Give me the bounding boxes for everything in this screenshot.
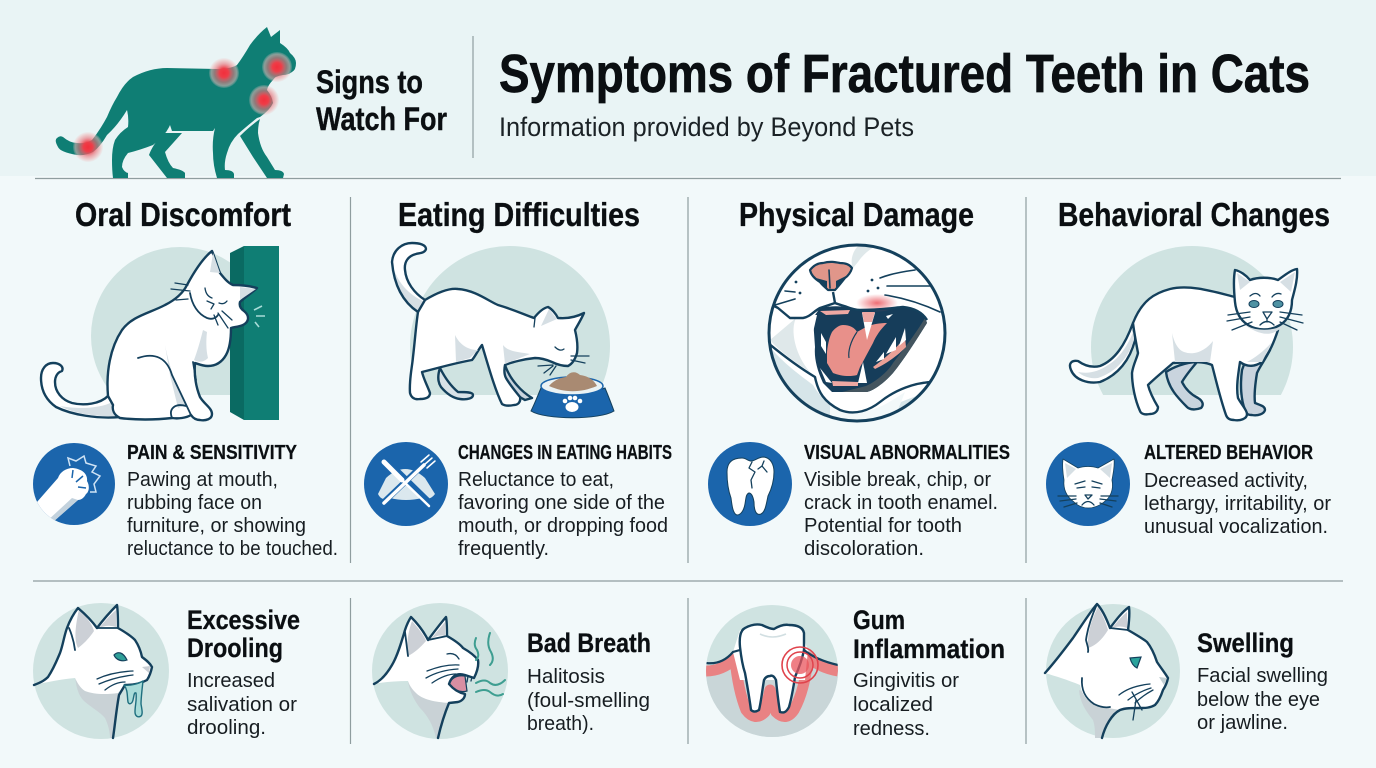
illustration: open mouth with broken tooth — [768, 245, 950, 430]
text: pain and sensitivity: furniture, or showing — [127, 514, 306, 537]
text: gum inflammation — [853, 605, 1005, 740]
text: swelling: or jawline. — [1197, 711, 1288, 734]
text: swelling: Facial swelling — [1197, 664, 1328, 687]
text: visual abnormalities: crack in tooth enamel. — [804, 491, 998, 514]
text: altered behavior: lethargy, irritability, or — [1144, 492, 1331, 515]
heading: Oral Discomfort — [75, 196, 291, 233]
panel: behavioral changes — [1046, 196, 1331, 538]
text: changes in eating habits: mouth, or dropping food — [458, 514, 668, 537]
text: pain and sensitivity: reluctance to be touched. — [127, 537, 338, 560]
text: changes in eating habits: frequently. — [458, 537, 549, 560]
text: pain and sensitivity: Pawing at mouth, — [127, 468, 278, 491]
illustration: cat eating from bowl — [390, 242, 615, 418]
icon: cat head with swollen jaw — [1045, 604, 1180, 738]
text: visual abnormalities — [804, 442, 1010, 560]
text: gum inflammation: localized — [853, 693, 933, 716]
text: visual abnormalities: VISUAL ABNORMALITIES — [804, 442, 1010, 464]
panel: bad breath — [372, 603, 651, 739]
icon: cracked tooth — [708, 442, 792, 526]
text: swelling: Swelling — [1197, 628, 1294, 658]
text: excessive drooling — [187, 605, 300, 739]
text: swelling: below the eye — [1197, 688, 1320, 711]
text: visual abnormalities: Potential for tooth — [804, 514, 962, 537]
icon: sad cat face — [1046, 442, 1130, 526]
text: bad breath: breath). — [527, 712, 594, 735]
text: visual abnormalities: discoloration. — [804, 537, 924, 560]
text: changes in eating habits: Reluctance to eat, — [458, 468, 614, 491]
panel: swelling — [1045, 604, 1328, 738]
source line: Information provided by Beyond Pets — [499, 112, 914, 142]
heading: Eating Difficulties — [398, 196, 640, 233]
text: excessive drooling: salivation or — [187, 693, 297, 716]
header — [56, 27, 1310, 178]
text: gum inflammation: Inflammation — [853, 634, 1005, 664]
panel: oral discomfort — [30, 196, 338, 560]
icon: tooth with inflamed gum — [706, 605, 840, 740]
panel: eating difficulties — [364, 196, 672, 560]
illustration: sad cat standing — [1068, 246, 1304, 422]
text: altered behavior: Decreased activity, — [1144, 469, 1308, 492]
icon: cat head drooling — [33, 603, 169, 739]
subtitle: signs to watch for — [316, 64, 447, 137]
text: changes in eating habits: CHANGES IN EATING HABITS — [458, 442, 672, 464]
text: visual abnormalities: Visible break, chip, or — [804, 468, 991, 491]
text: gum inflammation: redness. — [853, 717, 930, 740]
text: bad breath: Bad Breath — [527, 628, 651, 658]
text: excessive drooling: Drooling — [187, 633, 283, 663]
panel: gum inflammation — [706, 605, 1005, 740]
text: pain and sensitivity — [127, 442, 338, 560]
text: excessive drooling: Excessive — [187, 605, 300, 635]
text: changes in eating habits — [458, 442, 672, 560]
text: altered behavior: ALTERED BEHAVIOR — [1144, 442, 1313, 464]
text: swelling — [1197, 628, 1328, 734]
heading: Physical Damage — [739, 196, 974, 233]
text: bad breath — [527, 628, 651, 735]
text: excessive drooling: drooling. — [187, 716, 266, 739]
text: altered behavior — [1144, 442, 1331, 538]
subtitle: signs to watch for: Watch For — [316, 101, 447, 137]
subtitle: signs to watch for: Signs to — [316, 64, 423, 100]
text: bad breath: Halitosis — [527, 665, 605, 688]
icon: cat head with foul breath — [372, 603, 508, 739]
text: excessive drooling: Increased — [187, 669, 275, 692]
illustration: cat rubbing face on furniture — [41, 246, 279, 425]
text: bad breath: (foul-smelling — [527, 689, 650, 712]
icon: teal cat silhouette with red pain points — [56, 27, 296, 178]
icon: crossed knife and fork over bowl — [364, 442, 448, 526]
heading: Behavioral Changes — [1058, 196, 1330, 233]
text: gum inflammation: Gingivitis or — [853, 669, 959, 692]
text: altered behavior: unusual vocalization. — [1144, 515, 1328, 538]
text: pain and sensitivity: rubbing face on — [127, 491, 262, 514]
panel: excessive drooling — [33, 603, 300, 739]
text: gum inflammation: Gum — [853, 605, 905, 635]
panel: physical damage — [708, 196, 1010, 560]
text: pain and sensitivity: PAIN & SENSITIVITY — [127, 442, 298, 464]
text: changes in eating habits: favoring one side of the — [458, 491, 665, 514]
icon: paw with pain burst — [30, 443, 115, 525]
